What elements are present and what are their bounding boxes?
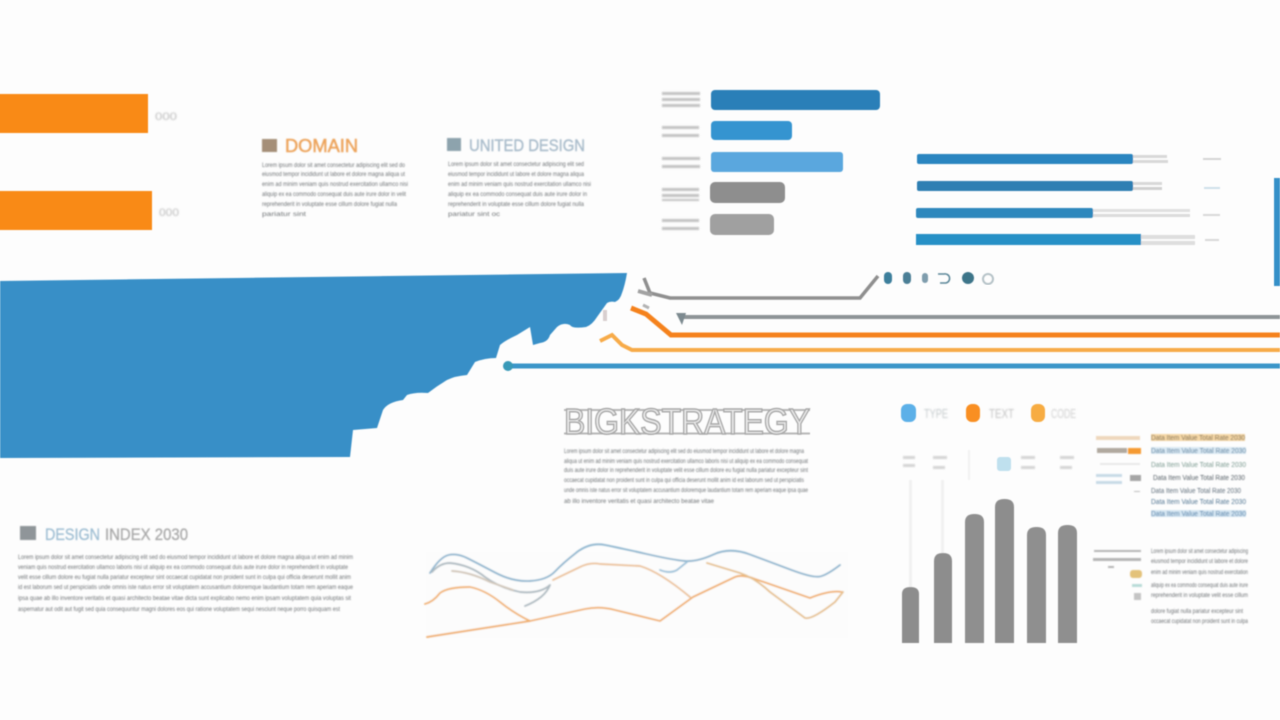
column stems [909, 450, 970, 587]
body text: lower left: aspernatur aut odit aut fugit sed quia consequuntur magni dolores eos qui ratione voluptatem sequi nesciunt neque porro quisquam est [18, 606, 340, 613]
gray line [681, 315, 1280, 319]
blue line marker [503, 361, 513, 371]
falling series [707, 563, 843, 618]
body text: united design: Lorem ipsum dolor sit amet consectetur adipiscing elit sed [448, 161, 584, 168]
body text: domain: aliquip ex ea commodo consequat duis aute irure dolor in velit [262, 191, 406, 198]
body text: domain: reprehenderit in voluptate esse cillum dolore fugiat nulla [262, 201, 397, 208]
orange bar label 2: 000 [159, 207, 179, 219]
heading: united design: UNITED DESIGN [469, 136, 585, 155]
body text: united design: reprehenderit in voluptate esse cillum dolore fugiat nulla [448, 201, 584, 208]
table row 7: Data Item Value Total Rate 2030 [1151, 511, 1246, 518]
body text: united design [448, 161, 591, 218]
table row 4: Data Item Value Total Rate 2030 [1153, 475, 1245, 482]
chart legend [901, 404, 1076, 422]
text block: domain [262, 136, 408, 218]
icon: lower left [20, 526, 36, 540]
body text: lower left [18, 554, 353, 613]
legend label blue: TYPE [924, 406, 948, 421]
body text: domain: pariatur sint [262, 211, 306, 218]
legend swatch blue [901, 404, 916, 422]
body text: domain: enim ad minim veniam quis nostrud exercitation ullamco nisi [262, 181, 408, 188]
body text: domain: eiusmod tempor incididunt ut labore et dolore magna aliqua ut [262, 171, 405, 178]
legend swatch orange [966, 404, 980, 422]
bar chart: progress bars [916, 154, 1221, 245]
icon: dot 1 [884, 272, 892, 284]
body text: united design: enim ad minim veniam quis nostrud exercitation ullamco nisi [448, 181, 591, 188]
tan series [452, 571, 513, 590]
progress row 4 [916, 234, 1219, 245]
gray line to icons [644, 276, 878, 298]
title rules [564, 410, 810, 434]
progress row 1 [917, 154, 1221, 164]
table row 5: Data Item Value Total Rate 2030 [1151, 488, 1241, 495]
panel: orange bars [0, 94, 179, 230]
orange series low [427, 576, 842, 637]
column 6 [1058, 525, 1077, 643]
text block: centre body [564, 448, 808, 505]
heading: domain: DOMAIN [285, 136, 358, 156]
connector lines [503, 276, 1280, 371]
table row 1: Data Item Value Total Rate 2030 [1151, 435, 1245, 442]
table row 4 [1096, 474, 1245, 484]
blue accent [660, 562, 687, 572]
notes header [1093, 550, 1141, 568]
middle series [553, 563, 690, 597]
gray smudge [643, 305, 649, 308]
table row 6: Data Item Value Total Rate 2030 [1151, 499, 1246, 506]
body text: lower left: Lorem ipsum dolor sit amet consectetur adipiscing elit sed do eiusmod tempor incididunt ut labore et dolore magna aliqua ut enim ad minim [18, 554, 353, 561]
title text: BIGKSTRATEGY [564, 401, 810, 442]
notes marker gray [1134, 593, 1141, 600]
edge blue bar [1274, 178, 1280, 286]
gray branch [638, 291, 652, 295]
table row 3: Data Item Value Total Rate 2030 [1151, 462, 1246, 469]
notes text: dolore fugiat nulla pariatur excepteur sint [1151, 608, 1243, 615]
orange bar 1 [0, 94, 148, 133]
text block: centre body: duis aute irure dolor in reprehenderit in voluptate velit esse cillum dolore eu fugiat nulla pariatur excepteur sint [564, 467, 808, 474]
title [564, 401, 810, 442]
notes marker teal [1132, 584, 1142, 587]
orange bar 2 [0, 191, 152, 230]
bar labels [662, 92, 700, 230]
icon row [884, 272, 993, 284]
text block: centre body: ab illo inventore veritatis et quasi architecto beatae vitae [564, 498, 714, 505]
notes text: occaecat cupidatat non proident sunt in culpa [1151, 618, 1248, 625]
blue line [507, 364, 1280, 368]
highlighted swatch [997, 457, 1011, 471]
chart backdrop [426, 552, 848, 638]
notes text [1151, 548, 1248, 625]
bar 1 [711, 90, 880, 110]
column 1 [902, 587, 919, 643]
notes text: reprehenderit in voluptate velit esse cillum [1151, 592, 1248, 599]
icon: dot 3 [922, 273, 928, 283]
icon: dot 4 [962, 272, 974, 284]
legend label amber: CODE [1051, 406, 1076, 421]
bar chart: top horizontal bars [662, 90, 880, 235]
gray line marker [676, 313, 686, 325]
table row 1 [1096, 434, 1245, 442]
text block: lower left [18, 525, 353, 613]
text block: united design [447, 136, 591, 218]
icon: dot 2 [903, 272, 911, 284]
body text: lower left: velit esse cillum dolore eu fugiat nulla pariatur excepteur sint occaecat cupidatat non proident sunt in culpa qui officia deserunt mollit anim [18, 574, 351, 581]
legend swatch amber [1031, 404, 1045, 422]
data table [1096, 434, 1246, 518]
progress row 2 [917, 181, 1220, 191]
body text: lower left: veniam quis nostrud exercitation ullamco laboris nisi ut aliquip ex ea commodo consequat duis aute irure dolor in reprehenderit in voluptate [18, 564, 348, 571]
text block: centre body: aliqua ut enim ad minim veniam quis nostrud exercitation ullamco laboris nisi ut aliquip ex ea commodo consequat [564, 458, 808, 465]
bar 4 [710, 182, 785, 203]
text block: centre body: unde omnis iste natus error sit voluptatem accusantium doloremque laudantium totam rem aperiam eaque ipsa quae [564, 487, 808, 494]
icon: domain [262, 139, 277, 152]
light orange line [600, 335, 1280, 350]
orange line [631, 308, 1280, 335]
icon: bracket [938, 274, 950, 283]
notes block [1093, 548, 1248, 625]
column 3 [965, 514, 984, 643]
body text: united design: eiusmod tempor incididunt ut labore et dolore magna aliqua [448, 171, 584, 178]
orange bar label 1: 000 [155, 111, 177, 123]
column chart [902, 450, 1077, 643]
icon: united design [447, 138, 461, 151]
heading: lower left gray: INDEX 2030 [105, 525, 188, 544]
column labels [903, 456, 1074, 469]
bar 2 [711, 121, 792, 140]
body text: lower left: id est laborum sed ut perspiciatis unde omnis iste natus error sit voluptatem accusantium doloremque laudantium totam rem aperiam eaque [18, 584, 353, 591]
heading: lower left blue: DESIGN [45, 525, 100, 544]
body text: united design: aliquip ex ea commodo consequat duis aute irure dolor in [448, 191, 587, 198]
text block: centre body: Lorem ipsum dolor sit amet consectetur adipiscing elit sed do eiusmod tempor incididunt ut labore et dolore magna [564, 448, 804, 455]
column 5 [1027, 527, 1046, 643]
line chart [425, 544, 848, 638]
body text: domain: Lorem ipsum dolor sit amet consectetur adipiscing elit sed do [262, 162, 405, 169]
progress row 3 [916, 208, 1220, 218]
body text: lower left: ipsa quae ab illo inventore veritatis et quasi architecto beatae vitae dicta sunt explicabo nemo enim ipsam voluptatem quia voluptas sit [18, 595, 351, 602]
text block: centre body: occaecat cupidatat non proident sunt in culpa qui officia deserunt mollit anim id est laborum sed ut perspiciatis [564, 477, 805, 484]
table row 2 [1097, 447, 1246, 455]
body text: domain [262, 162, 408, 218]
bar 5 [710, 214, 774, 235]
small gray mark [603, 310, 607, 321]
orange series high [425, 587, 530, 621]
bar 3 [711, 152, 843, 172]
blue series [430, 544, 840, 581]
notes text: eiusmod tempor incididunt ut labore et dolore [1151, 558, 1248, 565]
gray-blue series [432, 563, 550, 606]
icon: ring [983, 274, 993, 284]
table row 2: Data Item Value Total Rate 2030 [1151, 448, 1246, 455]
blue mountain shape [0, 273, 627, 458]
column 2 [934, 553, 952, 643]
body text: united design: pariatur sint oc [448, 211, 501, 218]
column 4 [995, 499, 1014, 643]
notes marker amber [1130, 570, 1142, 578]
legend label orange: TEXT [989, 406, 1014, 421]
